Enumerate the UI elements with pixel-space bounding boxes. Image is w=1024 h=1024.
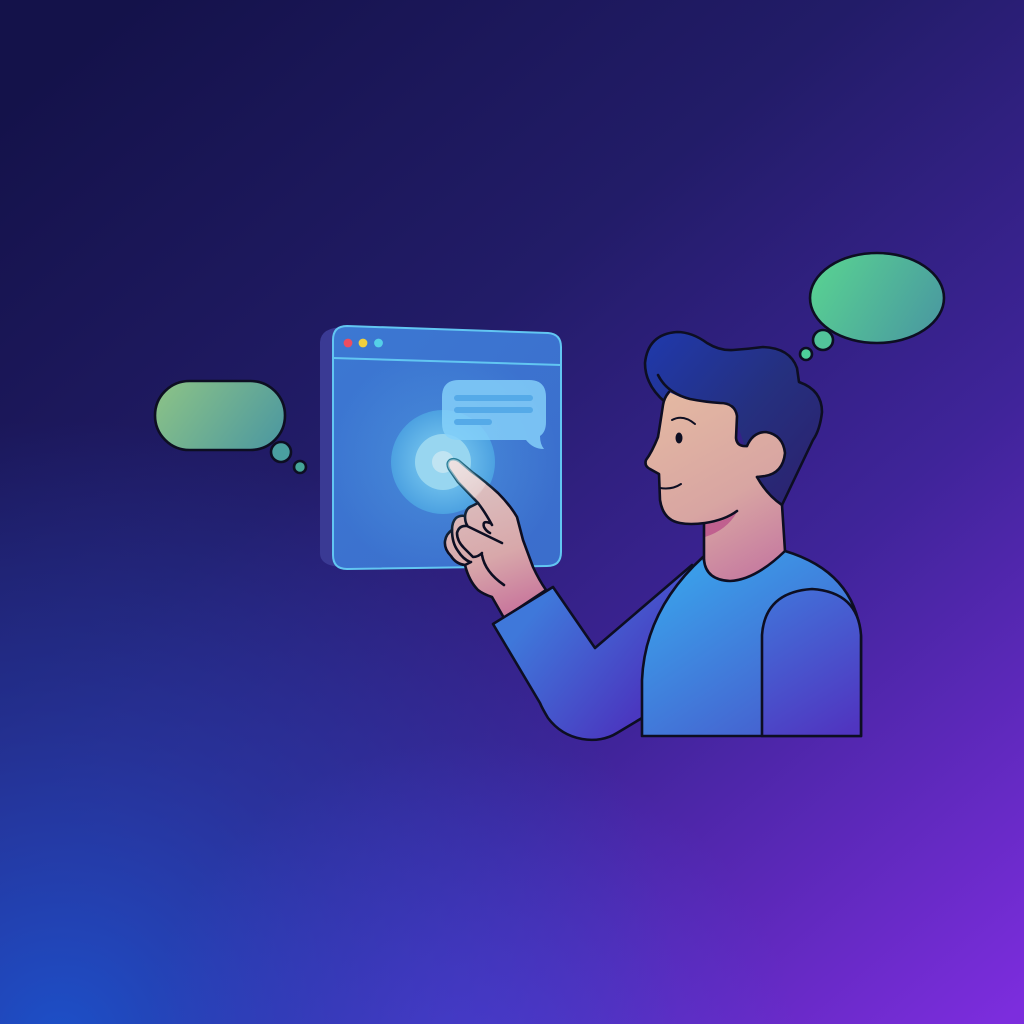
window depth shadow xyxy=(320,327,345,567)
window inner glow xyxy=(334,359,560,568)
thought bubble: right xyxy=(800,253,944,360)
eyebrow xyxy=(672,418,695,424)
back hair line xyxy=(757,477,782,505)
face xyxy=(646,392,765,524)
neck outline xyxy=(704,505,785,560)
arm xyxy=(493,565,692,740)
face outline xyxy=(646,392,737,524)
neck shadow xyxy=(705,512,737,537)
hand pointing xyxy=(445,459,546,618)
hairline xyxy=(658,375,747,446)
torso xyxy=(642,551,861,736)
chat bubble on screen xyxy=(442,380,546,449)
person xyxy=(445,332,861,740)
ear xyxy=(747,432,785,477)
floating interface window xyxy=(320,326,561,569)
window title bar divider xyxy=(333,358,561,365)
hair fill xyxy=(645,332,822,505)
neck xyxy=(704,477,785,581)
touch ripple xyxy=(391,410,495,514)
window panel xyxy=(333,326,561,569)
hair outline xyxy=(645,332,822,505)
glowing fingertip xyxy=(448,459,486,500)
thought bubble: left xyxy=(155,381,306,473)
eye xyxy=(676,432,682,444)
smile xyxy=(660,484,681,488)
window control dots xyxy=(344,339,383,347)
upper arm sleeve xyxy=(762,589,861,736)
